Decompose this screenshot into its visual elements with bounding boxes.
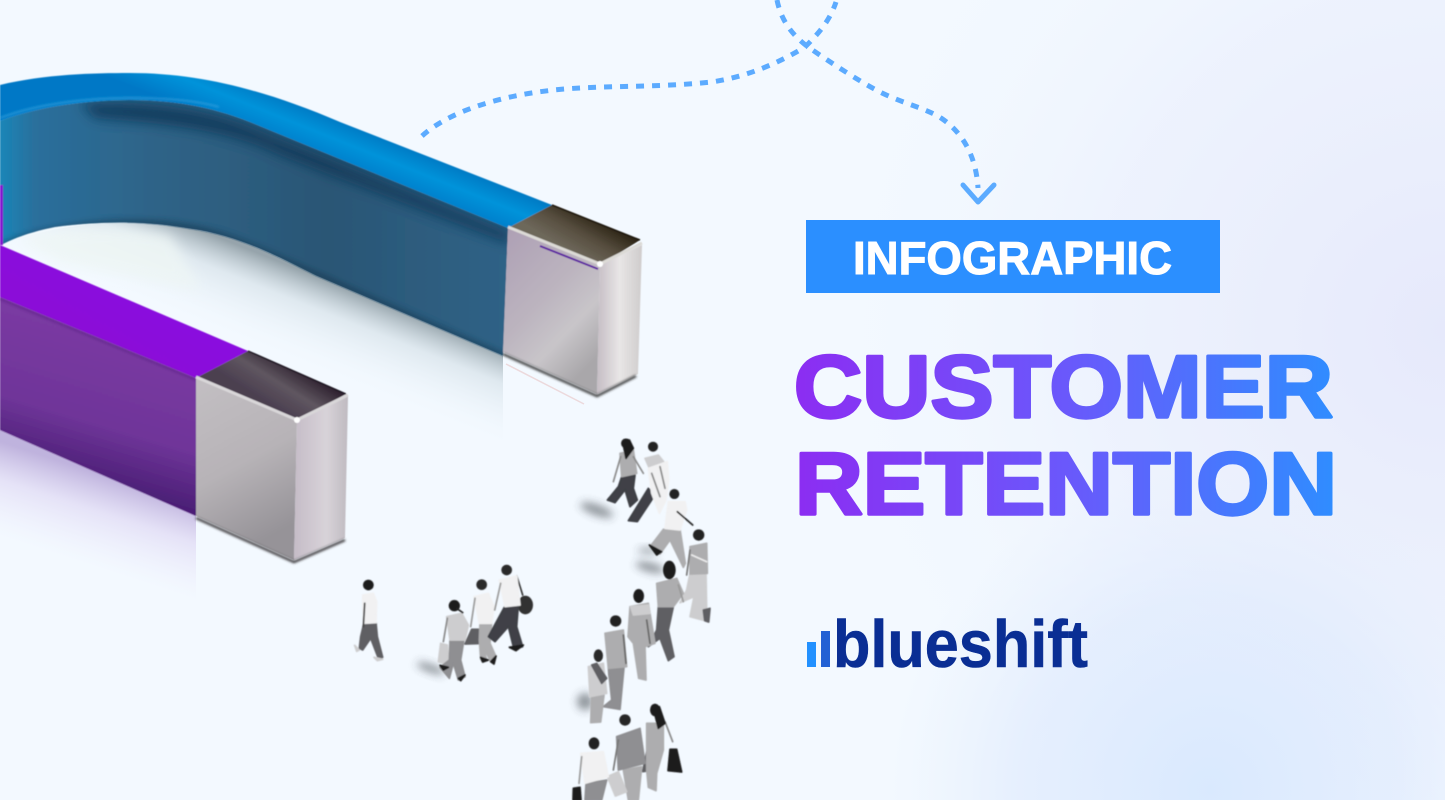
logo wordmark: blueshift bbox=[833, 607, 1088, 682]
person: woman in dress bbox=[628, 589, 655, 680]
title line 2: RETENTION bbox=[795, 434, 1337, 533]
person: woman at bottom left bbox=[573, 737, 608, 800]
group of walking people bbox=[355, 438, 710, 800]
person: man with draped garment bbox=[628, 442, 669, 522]
logo bars icon bbox=[807, 631, 830, 667]
ground shadows bbox=[416, 499, 665, 710]
arrowhead bbox=[963, 185, 994, 202]
blue arm silver tip bbox=[503, 205, 642, 396]
person: woman with shopping bag bbox=[438, 600, 468, 681]
purple arm bbox=[0, 245, 248, 516]
dashed line: right strand bbox=[777, 0, 978, 188]
person: long-haired woman at top bbox=[607, 438, 643, 507]
person: man with shoulder bag bbox=[488, 565, 533, 651]
person: man in centre line bbox=[603, 615, 627, 709]
magnet floor reflections bbox=[0, 223, 584, 640]
title bbox=[794, 337, 1337, 533]
infographic label banner bbox=[806, 220, 1220, 293]
person: man with dark stick bbox=[649, 489, 693, 567]
person: man at right edge bbox=[680, 529, 710, 622]
person: woman with dark hair bbox=[648, 561, 683, 661]
person: man with white bag bbox=[607, 714, 645, 800]
dashed looping arrow bbox=[422, 0, 994, 202]
title line 1: CUSTOMER bbox=[794, 337, 1333, 436]
person: single walker bbox=[355, 580, 383, 661]
magnet bbox=[0, 73, 642, 562]
blueshift logo bbox=[807, 607, 1088, 682]
purple sliver at left edge bbox=[0, 185, 3, 245]
person: woman in white top bbox=[465, 579, 496, 664]
banner text: INFOGRAPHIC bbox=[853, 232, 1172, 284]
blue arm bbox=[0, 73, 552, 360]
person: woman with black bag bbox=[643, 704, 682, 791]
person: girl bbox=[588, 649, 607, 723]
purple arm silver tip bbox=[196, 351, 348, 562]
dashed line: left strand bbox=[422, 2, 836, 136]
